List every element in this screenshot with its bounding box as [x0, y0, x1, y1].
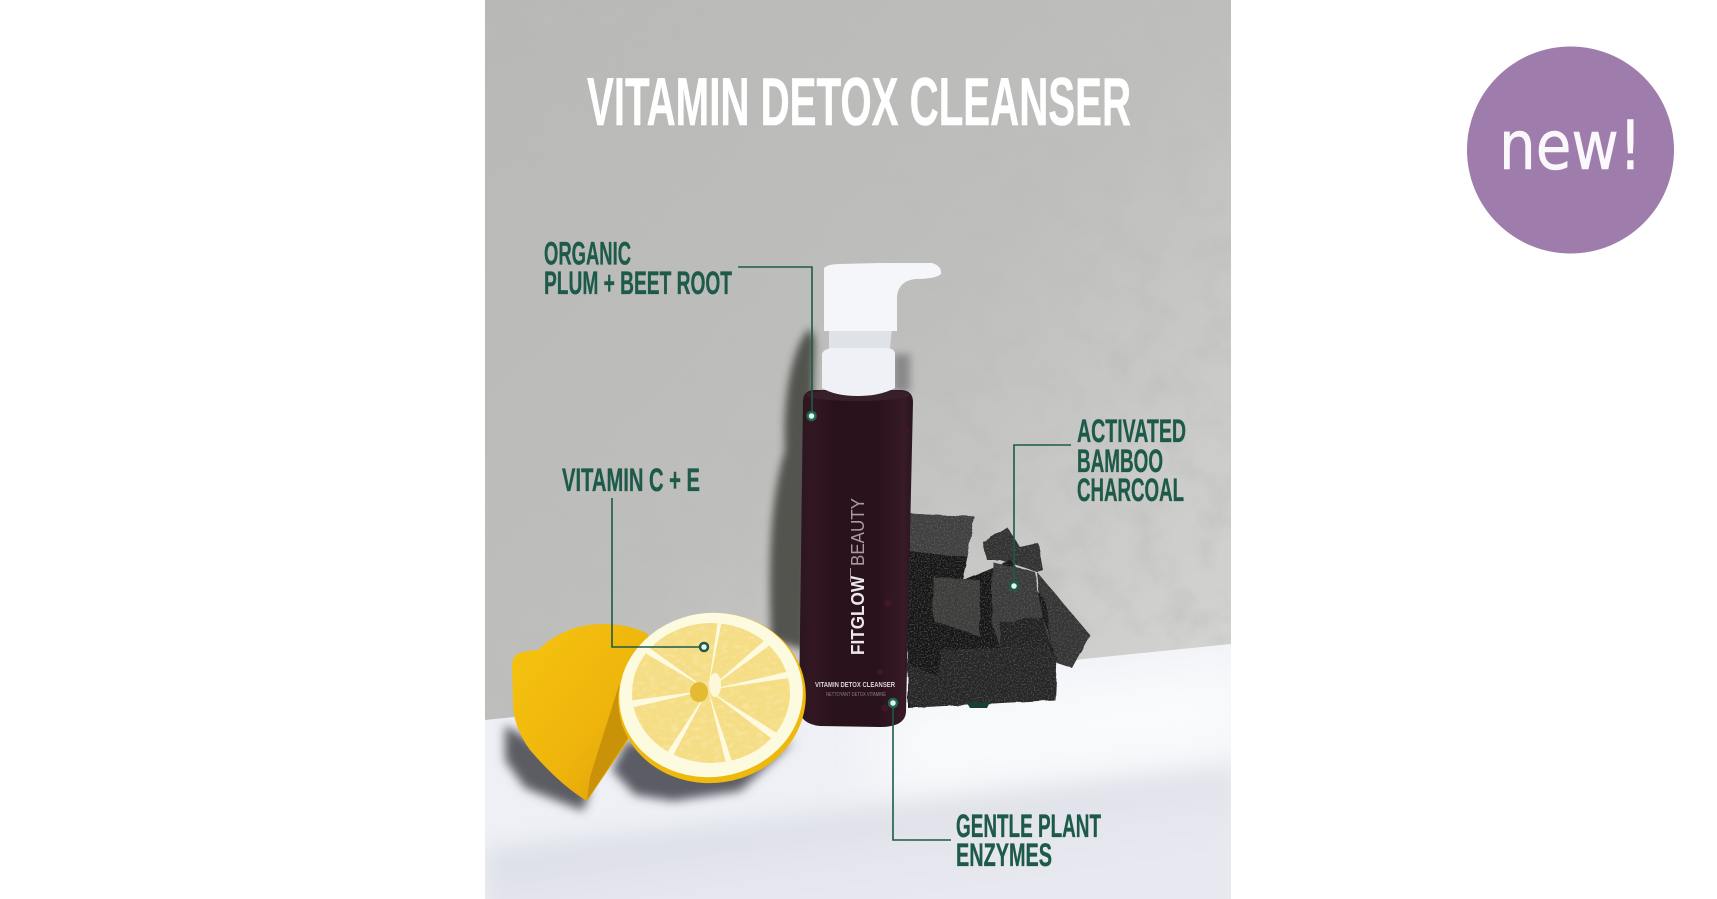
badge: new — [1467, 46, 1674, 254]
brand text light: BEAUTY — [848, 498, 868, 566]
lemon inner cut — [587, 685, 630, 800]
brand text: FITGLOW — [848, 576, 868, 655]
lemon segments — [632, 623, 788, 762]
label: organic plum and beet root — [544, 242, 732, 294]
pump stem — [829, 331, 892, 348]
callout line: charcoal — [1010, 445, 1071, 590]
pump shadow on wall — [893, 354, 910, 392]
lemon shadows — [505, 725, 795, 811]
pump collar — [822, 348, 895, 396]
lemon core — [690, 682, 708, 702]
pump head — [824, 263, 941, 331]
concrete wall — [485, 0, 1231, 740]
label: activated bamboo charcoal: BAMBOO — [1077, 443, 1163, 479]
product subtitle on bottle: NETTOYANT DETOX VITAMINÉ — [826, 691, 887, 698]
label: gentle plant enzymes: ENZYMES — [956, 837, 1052, 873]
lemon — [512, 601, 817, 801]
label: activated bamboo charcoal: CHARCOAL — [1077, 472, 1184, 508]
droplets — [877, 427, 909, 712]
bottle — [799, 263, 941, 727]
brand divider — [850, 568, 851, 582]
label: activated bamboo charcoal: ACTIVATED — [1077, 413, 1186, 449]
title: VITAMIN DETOX CLEANSER — [587, 64, 1131, 140]
label: vitamin c + e: VITAMIN C + E — [562, 462, 700, 498]
label: organic plum and beet root: PLUM + BEET ROOT — [544, 265, 732, 301]
label: organic plum and beet root: ORGANIC — [544, 236, 631, 272]
product name on bottle: VITAMIN DETOX CLEANSER — [815, 680, 895, 689]
bottle body — [799, 390, 913, 727]
white ledge — [485, 644, 1260, 899]
badge: new: new! — [1499, 107, 1642, 186]
panel: product photo — [485, 0, 1260, 899]
lemon dome — [512, 624, 650, 801]
callout line: vitamin — [612, 498, 708, 651]
bottle shadow on wall — [770, 328, 815, 650]
label: activated bamboo charcoal — [1077, 419, 1186, 502]
label: gentle plant enzymes — [956, 814, 1101, 866]
label: gentle plant enzymes: GENTLE PLANT — [956, 808, 1101, 844]
charcoal pile — [907, 513, 1090, 708]
callout line: enzymes — [889, 699, 951, 840]
lemon cut half — [618, 612, 806, 784]
callout line: plum — [738, 267, 816, 420]
